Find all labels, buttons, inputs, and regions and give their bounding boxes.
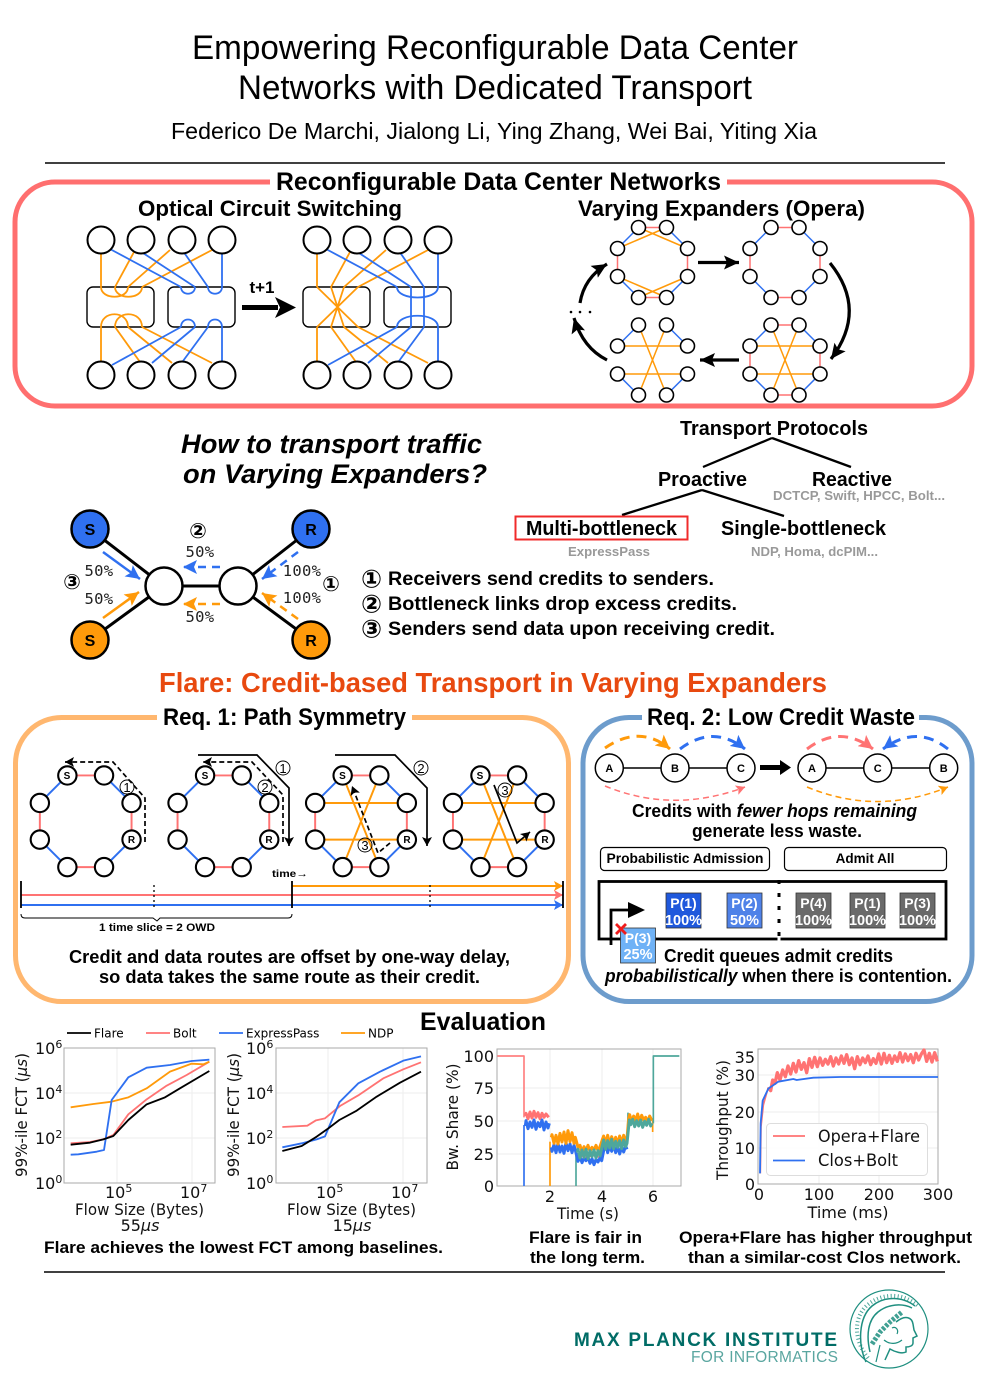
percentage labels: 50%	[186, 608, 215, 626]
transport protocols tree: Single-bottleneck	[721, 518, 887, 540]
node: blue receiver	[292, 510, 330, 548]
chart legend: Flare	[94, 1026, 124, 1040]
cycle arrows	[570, 262, 849, 360]
axis labels	[12, 1053, 204, 1235]
queued credit P4	[795, 893, 832, 929]
tick labels	[463, 1047, 658, 1206]
dropped credit P3	[616, 924, 656, 963]
label: probabilistic admission	[600, 848, 770, 870]
tick labels: 10	[735, 1139, 755, 1158]
percentage labels	[85, 543, 322, 626]
label: admit all	[784, 848, 946, 870]
transport protocols tree: DCTCP, Swift, HPCC, Bolt...	[773, 488, 945, 503]
panel: reconfigurable data center networks	[15, 168, 972, 406]
tick labels: 10	[391, 1183, 411, 1202]
heading: optical circuit switching: Optical Circuit Switching	[138, 196, 402, 221]
tick labels: 200	[864, 1185, 894, 1204]
expander graph 2	[743, 220, 827, 304]
expander graph 4	[610, 318, 694, 402]
percentage labels: 100%	[283, 589, 322, 607]
chart legend: Bolt	[173, 1026, 197, 1040]
caption: fewer hops	[632, 801, 917, 841]
percentage labels: 100%	[283, 562, 322, 580]
tick labels: 20	[735, 1103, 755, 1122]
octagon step 3	[306, 755, 428, 876]
numbered steps: ②	[361, 590, 382, 618]
tick labels: 10	[246, 1084, 266, 1103]
caption: fairness	[529, 1228, 645, 1267]
percentage labels: 50%	[85, 562, 114, 580]
caption: fairness: the long term.	[530, 1248, 645, 1267]
octagon step 1: 1	[123, 780, 131, 795]
queued credit P2	[727, 893, 762, 929]
heading: Req. 2: Low Credit Waste	[647, 704, 915, 731]
octagon step 2	[168, 755, 290, 876]
caption: Credit and data routes are offset by one-way delay,	[69, 947, 510, 967]
octagon step 4: R	[541, 835, 549, 846]
legend: Opera+Flare	[818, 1127, 920, 1147]
icon: Minerva seal	[850, 1290, 928, 1368]
axis labels: Time (s)	[556, 1204, 619, 1223]
axis labels: Flow Size (Bytes)	[75, 1200, 204, 1219]
arrow into queue	[611, 902, 645, 945]
node: orange receiver: R	[305, 633, 317, 650]
label: probabilistic admission: Probabilistic Admission	[606, 851, 764, 866]
chart legend: ExpressPass	[246, 1026, 319, 1040]
tick labels: 100	[463, 1047, 494, 1066]
octagon step 2: R	[265, 835, 273, 846]
octagon step 1: R	[128, 835, 136, 846]
chart legend	[67, 1026, 393, 1040]
title: Empowering Reconfigurable Data Center	[192, 29, 798, 67]
queued credit P4: P(4)	[800, 895, 827, 911]
queued credit P3 gray: 100%	[899, 913, 936, 929]
step numbers: ③	[63, 570, 81, 594]
axis labels	[443, 1064, 619, 1223]
node: blue sender: S	[85, 522, 96, 539]
octagon step 2: S	[202, 771, 209, 782]
tick labels: 5	[125, 1182, 132, 1195]
octagon step 2: 1	[279, 761, 287, 776]
lines	[282, 1056, 421, 1151]
label: admit all: Admit All	[836, 851, 894, 866]
timeline	[21, 868, 563, 934]
tick labels: 100	[804, 1185, 834, 1204]
chart: throughput	[713, 1048, 953, 1222]
queued credit P1 gray	[849, 893, 886, 929]
flare heading: Flare: Credit-based Transport in Varying Expanders	[159, 667, 827, 698]
hop diagram before: B	[671, 763, 679, 775]
diagram: OCS before	[87, 226, 236, 388]
tick labels: 10	[316, 1183, 336, 1202]
hop diagram before: A	[605, 763, 613, 775]
tick labels	[735, 1048, 953, 1204]
tick labels: 0	[266, 1173, 273, 1186]
tick labels: 10	[35, 1039, 55, 1058]
tick labels: 7	[200, 1182, 207, 1195]
chart: FCT 55us	[12, 1038, 215, 1235]
caption: throughput: than a similar-cost Clos network.	[688, 1248, 961, 1267]
queued credit P4: 100%	[795, 913, 832, 929]
octagon step 3: R	[403, 835, 411, 846]
hop diagram after: C	[874, 763, 882, 775]
queued credit P2: P(2)	[731, 895, 758, 911]
axis labels: Throughput (%)	[713, 1060, 732, 1181]
tick labels: 30	[735, 1066, 755, 1085]
queued credit P1 gray: 100%	[849, 913, 886, 929]
heading: varying expanders: Varying Expanders (Opera)	[578, 196, 865, 221]
transport protocols tree: NDP, Homa, dcPIM...	[751, 544, 878, 559]
noisy throughput series	[760, 1050, 938, 1173]
dropped credit P3: P(3)	[625, 930, 651, 946]
tick labels: 25	[474, 1145, 494, 1164]
hop diagram after: A	[808, 763, 816, 775]
queued credit P1: P(1)	[670, 895, 697, 911]
queued credit P2: 50%	[730, 913, 759, 929]
axis labels: 55μs	[121, 1216, 159, 1235]
node: orange receiver	[292, 622, 330, 658]
panel: req 2 low credit waste	[583, 704, 972, 1002]
tick labels: 0	[55, 1173, 62, 1186]
numbered steps: ③	[361, 614, 382, 644]
transport protocols tree: Reactive	[812, 469, 892, 491]
numbered steps: Receivers send credits to senders.	[388, 569, 714, 590]
arrow: t+1: t+1	[249, 278, 275, 297]
percentage labels: 50%	[186, 543, 215, 561]
octagon step 4	[444, 766, 554, 876]
title	[192, 29, 798, 107]
caption: fewer hops: Credits with fewer hops remaining	[632, 801, 917, 821]
tick labels: 4	[597, 1187, 607, 1206]
diagram: OCS after	[303, 226, 452, 388]
chart: FCT 15us	[224, 1038, 427, 1235]
tick labels: 10	[35, 1174, 55, 1193]
transport protocols tree: Proactive	[658, 469, 747, 491]
queued credit P1	[665, 893, 702, 929]
tick labels: 10	[246, 1174, 266, 1193]
tick labels: 35	[735, 1048, 755, 1067]
step numbers	[63, 519, 340, 596]
caption: probabilistic: Credit queues admit credits	[664, 946, 893, 966]
tick labels: 0	[745, 1175, 755, 1194]
octagon step 4: 3	[501, 783, 509, 798]
logo: max planck institute: FOR INFORMATICS	[691, 1349, 838, 1366]
caption	[69, 947, 510, 987]
axis labels: Bw. Share (%)	[443, 1064, 462, 1170]
tick labels: 300	[923, 1185, 953, 1204]
caption: throughput: Opera+Flare has higher throughput	[679, 1228, 972, 1247]
octagon step 3: 3	[361, 838, 369, 853]
hop diagram before: C	[737, 763, 745, 775]
node: orange sender: S	[85, 633, 96, 650]
caption: FCT: Flare achieves the lowest FCT among baselines.	[44, 1238, 443, 1257]
question heading: How to transport traffic	[181, 429, 482, 459]
tick labels: 10	[246, 1039, 266, 1058]
chart: bandwidth share	[443, 1047, 681, 1223]
queued credit P1 gray: P(1)	[854, 895, 881, 911]
legend: Clos+Bolt	[818, 1151, 898, 1171]
tick labels: 5	[336, 1182, 343, 1195]
transport protocols tree: ExpressPass	[568, 544, 650, 559]
tick labels: 50	[474, 1112, 494, 1131]
caption: probabilistic: probabilistically when there is contention.	[604, 966, 952, 986]
queued credit P3 gray: P(3)	[904, 895, 931, 911]
timeline: time→	[272, 868, 308, 880]
step numbers: ②	[189, 519, 207, 543]
tick labels: 10	[105, 1183, 125, 1202]
logo: max planck institute: MAX PLANCK INSTITUTE	[574, 1330, 837, 1351]
percentage labels: 50%	[85, 590, 114, 608]
dropped credit P3: 25%	[623, 947, 653, 963]
tick labels: 0	[754, 1185, 764, 1204]
axis labels: Time (ms)	[806, 1203, 888, 1222]
node: blue sender	[72, 510, 108, 548]
axis labels: 99%-ile FCT (μs)	[12, 1053, 31, 1177]
transport protocols tree: Multi-bottleneck	[526, 518, 678, 540]
axis labels	[224, 1053, 416, 1235]
question heading	[181, 429, 487, 489]
axis labels	[713, 1060, 888, 1222]
step numbers: ①	[322, 572, 340, 596]
numbered steps: ①	[361, 564, 382, 594]
tick labels: 0	[484, 1177, 494, 1196]
caption: fewer hops: generate less waste.	[692, 821, 862, 841]
credit topology diagram	[63, 510, 340, 658]
caption: fairness: Flare is fair in	[529, 1228, 642, 1247]
hop diagram after	[798, 736, 958, 802]
legend	[766, 1124, 928, 1176]
question heading: on Varying Expanders?	[183, 459, 487, 489]
queue box	[599, 880, 946, 963]
transport protocols tree	[516, 418, 945, 559]
numbered steps	[361, 564, 775, 644]
axis labels: Flow Size (Bytes)	[287, 1200, 416, 1219]
noisy share series	[497, 1056, 679, 1186]
numbered steps: Senders send data upon receiving credit.	[388, 619, 775, 640]
queued credit P1: 100%	[665, 913, 702, 929]
octagon step 1	[31, 762, 145, 876]
octagon step 3: 2	[417, 761, 425, 776]
expander graph 3	[743, 318, 827, 402]
octagon step 2: 2	[261, 780, 269, 795]
caption: probabilistic	[604, 946, 952, 986]
hop diagram after: B	[940, 763, 948, 775]
numbered steps: Bottleneck links drop excess credits.	[388, 594, 737, 615]
tick labels: 6	[55, 1038, 62, 1051]
tick labels: 4	[266, 1083, 273, 1096]
lines	[71, 1060, 209, 1155]
tick labels: 2	[55, 1128, 62, 1141]
node: blue receiver: R	[305, 522, 317, 539]
logo: max planck institute	[574, 1290, 928, 1368]
tick labels: 2	[266, 1128, 273, 1141]
tick labels: 4	[55, 1083, 62, 1096]
tick labels	[35, 1038, 207, 1202]
tick labels: 2	[545, 1187, 555, 1206]
hop diagram before	[595, 736, 755, 800]
authors: Federico De Marchi, Jialong Li, Ying Zhang, Wei Bai, Yiting Xia	[171, 118, 818, 144]
timeline: 1 time slice = 2 OWD	[99, 922, 215, 934]
tick labels: 10	[180, 1183, 200, 1202]
tick labels: 7	[411, 1182, 418, 1195]
arrow: t+1	[242, 278, 296, 318]
highlighted box: multi-bottleneck	[516, 516, 688, 540]
tick labels: 6	[648, 1187, 658, 1206]
node: orange sender	[72, 622, 108, 658]
title: Networks with Dedicated Transport	[238, 69, 753, 107]
panel: req 1 path symmetry	[16, 704, 568, 1002]
tick labels	[246, 1038, 418, 1202]
panel heading: Reconfigurable Data Center Networks	[276, 168, 721, 196]
transition arrow	[760, 760, 791, 775]
tick labels: 75	[474, 1079, 494, 1098]
axis labels: 15μs	[333, 1216, 371, 1235]
caption: throughput	[679, 1228, 972, 1267]
tick labels: 10	[246, 1129, 266, 1148]
heading: Req. 1: Path Symmetry	[163, 704, 407, 731]
tick labels: 10	[35, 1084, 55, 1103]
octagon step 1: S	[64, 771, 71, 782]
octagon step 4: S	[477, 771, 484, 782]
caption: so data takes the same route as their credit.	[99, 967, 480, 987]
axis labels: 99%-ile FCT (μs)	[224, 1053, 243, 1177]
flow arrows	[103, 552, 298, 619]
expander graph 1	[610, 220, 694, 304]
chart legend: NDP	[368, 1026, 393, 1040]
evaluation heading: Evaluation	[420, 1008, 546, 1036]
transport protocols tree: Transport Protocols	[680, 418, 868, 440]
tick labels: 10	[35, 1129, 55, 1148]
tick labels: 6	[266, 1038, 273, 1051]
octagon step 3: S	[339, 771, 346, 782]
queued credit P3 gray	[899, 893, 936, 929]
